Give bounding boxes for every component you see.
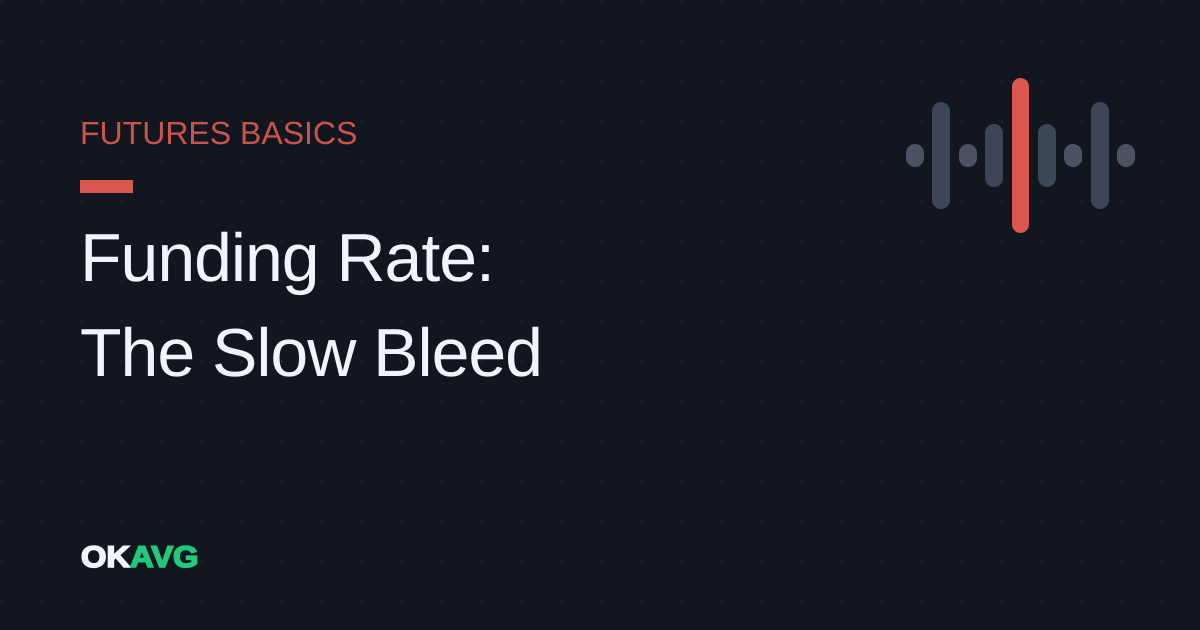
- accent bar: [80, 180, 133, 193]
- eyebrow label: FUTURES BASICS: [80, 115, 357, 151]
- title: [80, 220, 542, 391]
- title: Funding Rate:: [80, 220, 494, 296]
- title: The Slow Bleed: [80, 315, 542, 391]
- icon: waveform: [906, 78, 1135, 233]
- brand logo: OKAVG: [80, 541, 198, 574]
